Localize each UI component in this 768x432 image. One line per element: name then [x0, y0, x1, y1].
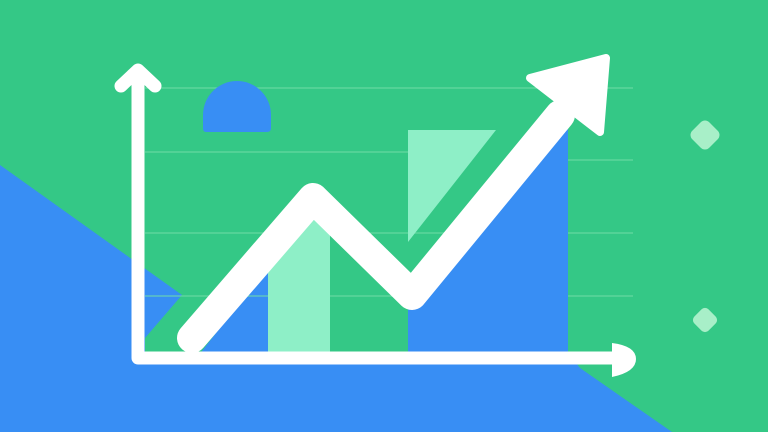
bar: light green: [268, 212, 330, 357]
icon: diamond lower: [691, 306, 719, 334]
light green triangle: [408, 130, 496, 242]
bar: blue: [408, 105, 568, 357]
icon: diamond upper: [688, 118, 722, 152]
blue background region: [0, 165, 672, 432]
trend arrow: [192, 58, 606, 338]
axes: [121, 70, 620, 358]
x axis arrow tip: [612, 343, 636, 377]
grid lines: [145, 88, 633, 296]
icon: blue half circle: [203, 81, 271, 132]
